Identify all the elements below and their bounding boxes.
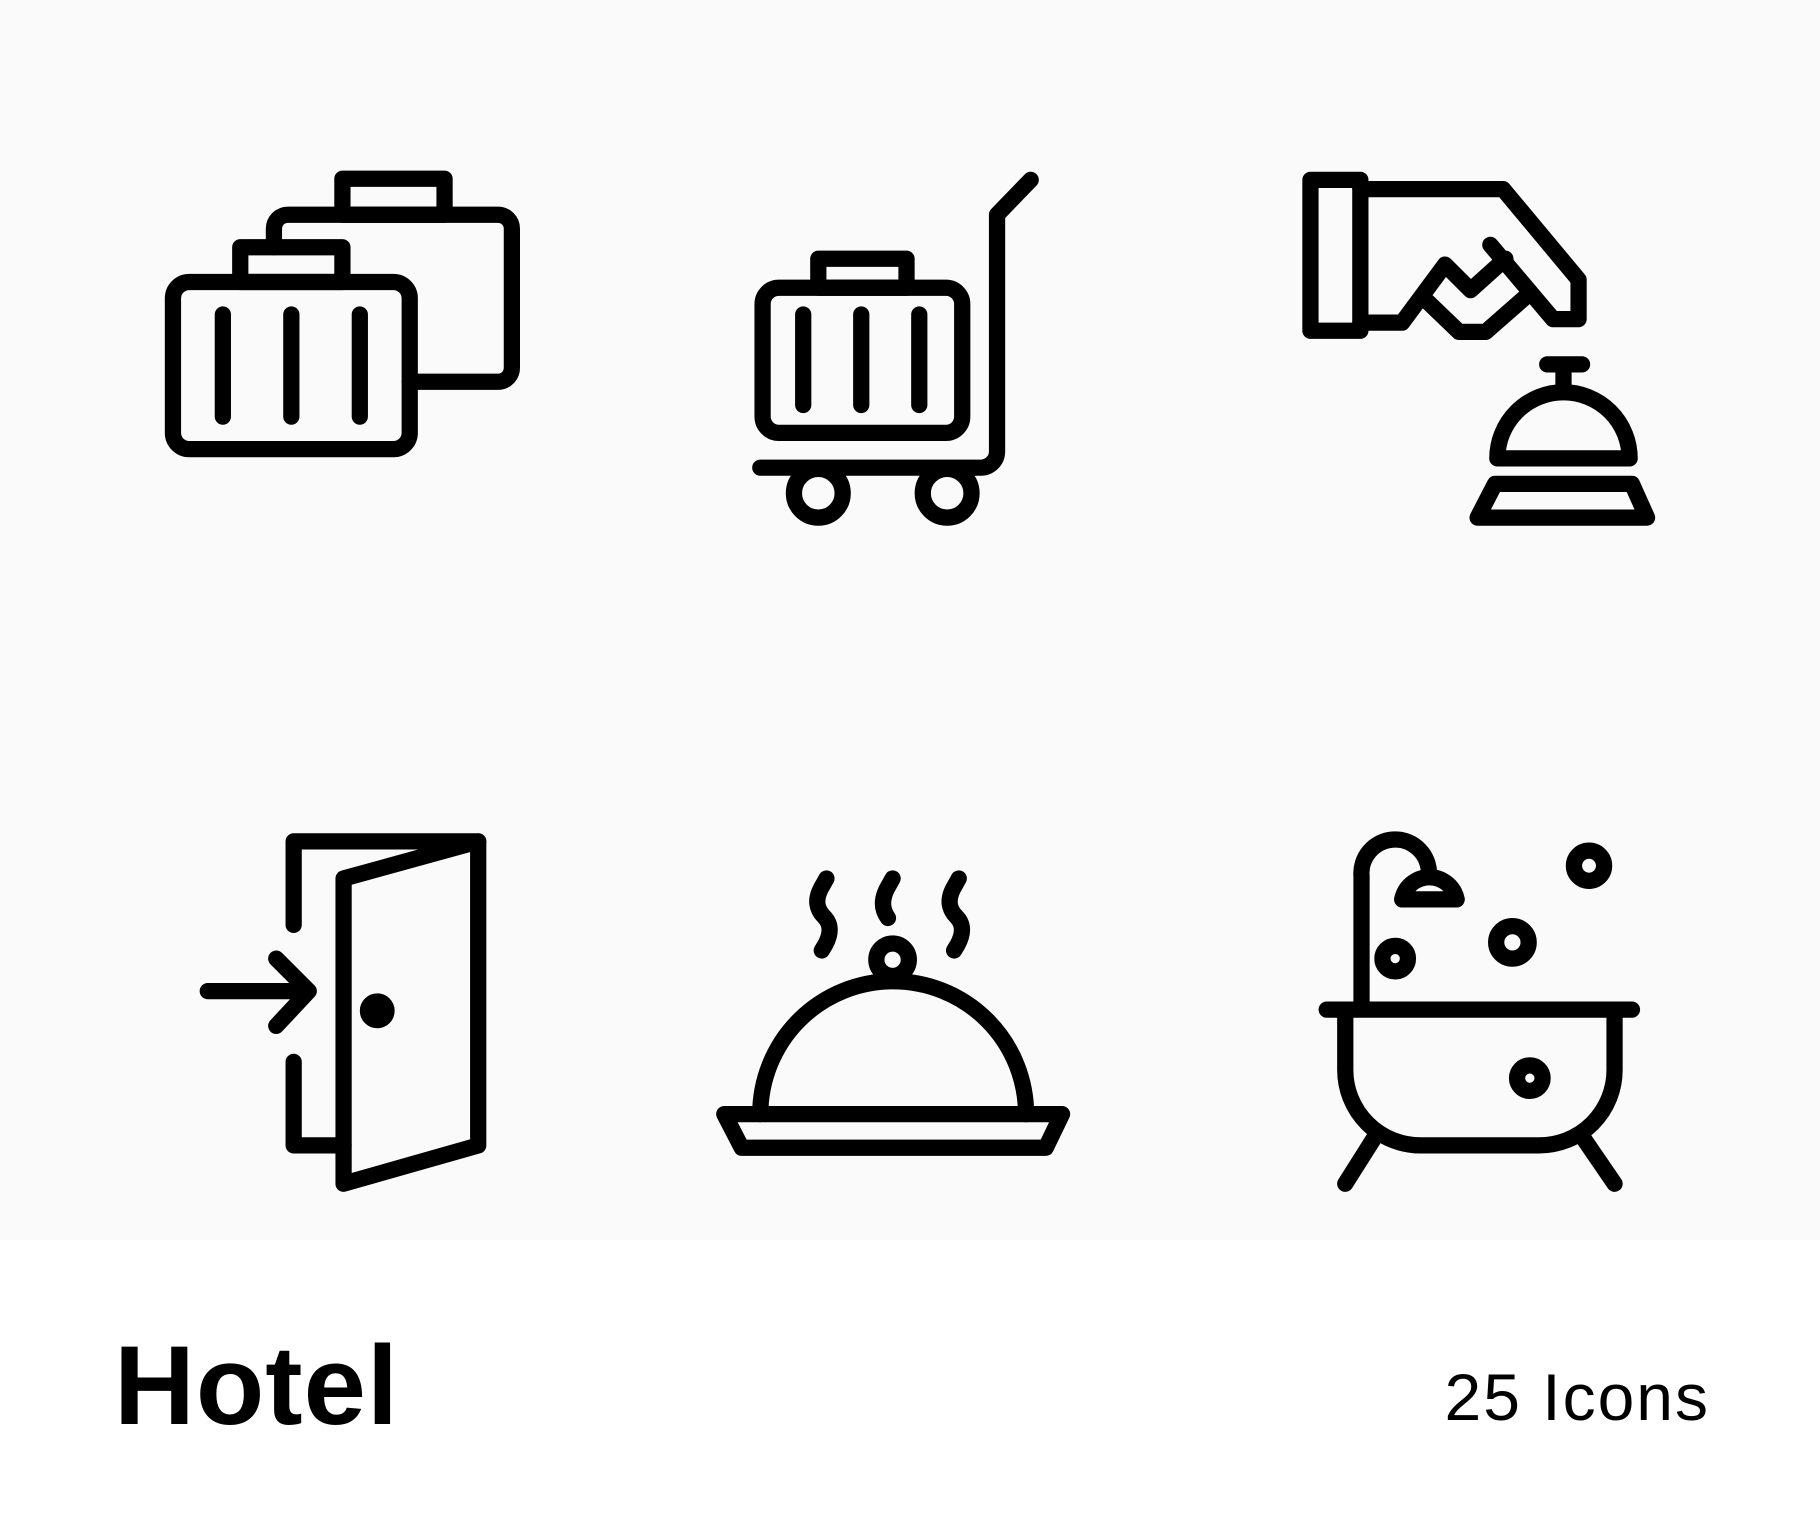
icon: room service cloche: [724, 879, 1062, 1148]
icon count: 25 Icons: [1444, 1360, 1710, 1434]
icon: hand ringing reception bell: [1310, 180, 1647, 518]
title: Hotel: [114, 1323, 399, 1448]
icon: two suitcases: [173, 179, 512, 449]
icon: luggage trolley: [760, 180, 1031, 518]
icon: bathtub with shower: [1327, 840, 1632, 1184]
icon: door with entry arrow: [208, 841, 478, 1184]
